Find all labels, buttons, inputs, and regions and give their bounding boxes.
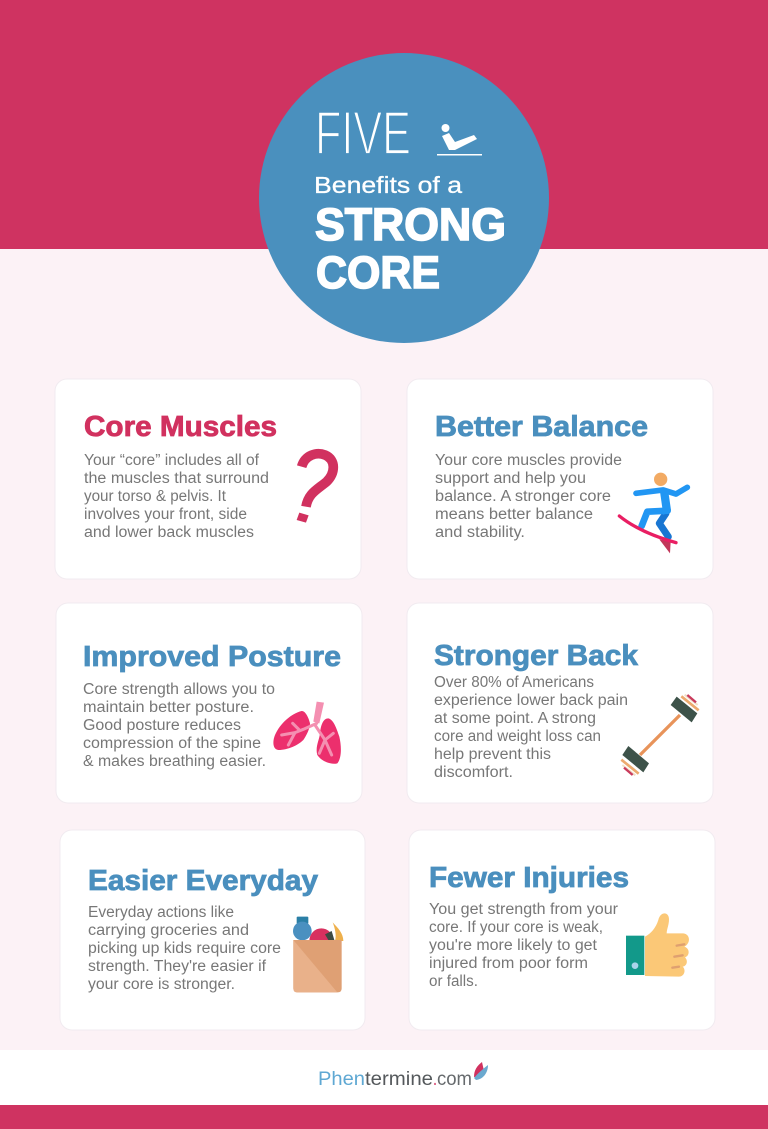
icon: core exercise figure bbox=[437, 124, 482, 156]
body text: better balance: support and help you bbox=[435, 470, 586, 487]
body text: stronger back: Over 80% of Americans bbox=[434, 674, 594, 691]
panel: better balance bbox=[407, 379, 713, 579]
body text: stronger back: discomfort. bbox=[434, 764, 513, 781]
body text: core muscles: the muscles that surround bbox=[84, 470, 269, 487]
heading: fewer injuries: Fewer Injuries bbox=[429, 862, 629, 894]
heading: improved posture: Improved Posture bbox=[83, 641, 341, 673]
icon: grocery bag bbox=[293, 917, 343, 992]
bottom crimson band bbox=[0, 1105, 768, 1129]
body text: core muscles bbox=[84, 452, 269, 541]
subtitle: Benefits of a: Benefits of a bbox=[314, 172, 463, 198]
icon: surfer bbox=[619, 473, 687, 553]
body text: easier everyday: strength. They're easier if bbox=[88, 958, 267, 975]
icon: thumbs up bbox=[626, 913, 689, 977]
icon: lungs bbox=[273, 702, 341, 764]
logo: Phentermine.com: Phen bbox=[318, 1069, 365, 1090]
footer white strip bbox=[0, 1050, 768, 1105]
body text: stronger back: help prevent this bbox=[434, 746, 551, 763]
title: STRONG: STRONG bbox=[315, 199, 506, 250]
body text: improved posture: compression of the spine bbox=[83, 735, 261, 752]
title: CORE: CORE bbox=[316, 247, 440, 298]
body text: improved posture: Core strength allows you to bbox=[83, 681, 275, 698]
body text: core muscles: and lower back muscles bbox=[84, 524, 254, 541]
body text: improved posture: Good posture reduces bbox=[83, 717, 241, 734]
panel: easier everyday bbox=[60, 830, 365, 1030]
body text: better balance bbox=[435, 452, 622, 541]
body text: easier everyday: Everyday actions like bbox=[88, 904, 234, 921]
logo: Phentermine.com: . bbox=[433, 1069, 437, 1090]
body text: easier everyday: picking up kids require core bbox=[88, 940, 281, 957]
top crimson band bbox=[0, 0, 768, 249]
body text: core muscles: involves your front, side bbox=[84, 506, 247, 523]
body text: easier everyday bbox=[88, 904, 281, 993]
logo: Phentermine.com: termine bbox=[365, 1069, 433, 1090]
body text: fewer injuries: you're more likely to get bbox=[429, 937, 598, 954]
icon: logo butterfly bbox=[474, 1062, 488, 1080]
body text: core muscles: Your “core” includes all of bbox=[84, 452, 260, 469]
logo: Phentermine.com bbox=[318, 1062, 488, 1090]
body text: stronger back: core and weight loss can bbox=[434, 728, 601, 745]
body text: easier everyday: carrying groceries and bbox=[88, 922, 249, 939]
body text: better balance: balance. A stronger core bbox=[435, 488, 611, 505]
panel: improved posture bbox=[56, 603, 362, 803]
body text: stronger back bbox=[434, 674, 628, 781]
panel: stronger back bbox=[407, 603, 713, 803]
icon: question mark bbox=[297, 454, 333, 523]
body text: improved posture: & makes breathing easier. bbox=[83, 753, 266, 770]
heading: better balance: Better Balance bbox=[435, 411, 648, 443]
body text: better balance: Your core muscles provide bbox=[435, 452, 622, 469]
body text: fewer injuries: injured from poor form bbox=[429, 955, 588, 972]
title badge bbox=[259, 53, 549, 343]
body text: better balance: means better balance bbox=[435, 506, 593, 523]
body text: improved posture: maintain better posture. bbox=[83, 699, 254, 716]
body text: fewer injuries: or falls. bbox=[429, 973, 478, 990]
body text: fewer injuries: core. If your core is weak, bbox=[429, 919, 603, 936]
panel: fewer injuries bbox=[409, 830, 715, 1030]
body text: better balance: and stability. bbox=[435, 524, 525, 541]
heading: easier everyday: Easier Everyday bbox=[88, 865, 318, 897]
icon: barbell bbox=[621, 695, 699, 775]
body text: core muscles: your torso & pelvis. It bbox=[84, 488, 227, 505]
body text: easier everyday: your core is stronger. bbox=[88, 976, 235, 993]
title: FIVE: FIVE bbox=[315, 99, 411, 167]
body text: stronger back: experience lower back pain bbox=[434, 692, 628, 709]
body text: stronger back: at some point. A strong bbox=[434, 710, 596, 727]
heading: stronger back: Stronger Back bbox=[434, 640, 638, 672]
heading: core muscles: Core Muscles bbox=[84, 411, 277, 443]
body text: fewer injuries bbox=[429, 901, 618, 990]
body text: fewer injuries: You get strength from your bbox=[429, 901, 618, 918]
logo: Phentermine.com: com bbox=[437, 1069, 472, 1090]
panel: core muscles bbox=[55, 379, 361, 579]
body text: improved posture bbox=[83, 681, 275, 770]
